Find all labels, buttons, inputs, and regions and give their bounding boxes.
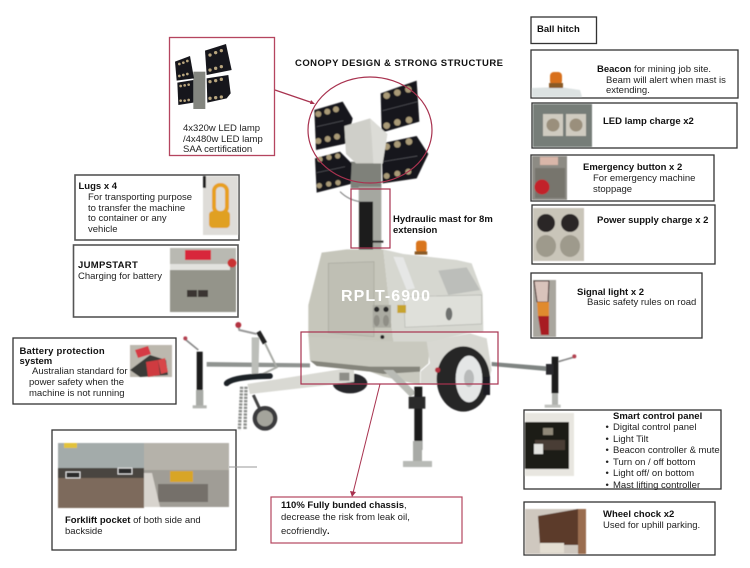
right jack <box>545 354 576 408</box>
panel: signal light <box>531 273 702 338</box>
panel: battery protection: power safety when the <box>29 377 124 388</box>
icon: LED lamp cluster <box>175 44 232 109</box>
panel: beacon: Beacon for mining job site. <box>597 64 711 75</box>
label: hydraulic mast: Hydraulic mast for 8m <box>393 214 493 225</box>
icon: wheel chock <box>525 509 586 554</box>
icon: battery isolator <box>130 345 172 377</box>
bullet list: • <box>606 422 609 433</box>
body lower and chassis <box>308 334 430 385</box>
LED lamp text <box>183 123 263 155</box>
LED lamp text: /4x480w LED lamp <box>183 134 263 145</box>
bullet list: • <box>606 480 609 491</box>
panel: lugs: For transporting purpose <box>88 192 192 203</box>
panel: forklift pocket: backside <box>65 526 102 537</box>
model label: RPLT-6900 <box>341 288 430 305</box>
bullet list: • <box>606 468 609 479</box>
LED lamp text: 4x320w LED lamp <box>183 123 260 134</box>
bullet list: Digital control panel <box>613 422 696 433</box>
back wheel <box>333 373 367 393</box>
body upper <box>308 249 393 342</box>
centre jack foot <box>403 441 432 467</box>
panel: emergency button: stoppage <box>593 184 632 195</box>
bullet list: Light off/ on bottom <box>613 468 694 479</box>
icon: emergency button <box>532 156 567 200</box>
panel: bunded chassis: decrease the risk from leak oil, <box>281 512 410 523</box>
beacon on roof <box>415 241 427 255</box>
panel: LED lamp charge: LED lamp charge x2 <box>603 116 694 127</box>
tongue jack and handle <box>235 322 277 377</box>
panel: bunded chassis: 110% Fully bunded chassis, <box>281 500 407 511</box>
bullet list: • <box>606 457 609 468</box>
panel: emergency button: Emergency button x 2 <box>583 162 682 173</box>
bullet list: • <box>606 445 609 456</box>
bullet list: Mast lifting controller <box>613 480 700 491</box>
lamp panels <box>314 81 428 193</box>
icon: jumpstart socket <box>170 248 236 312</box>
panel: battery protection: system <box>20 356 52 367</box>
panel: bunded chassis: ecofriendly. <box>281 526 330 537</box>
panel: LED lamp <box>170 38 274 156</box>
callout: chassis rectangle <box>301 332 498 384</box>
panel: ball hitch: Ball hitch <box>537 24 580 35</box>
trailer and body <box>183 241 576 450</box>
panel: lugs: vehicle <box>88 224 118 235</box>
label: hydraulic mast: extension <box>393 225 438 236</box>
LED lamp text: SAA certification <box>183 144 252 155</box>
panel: jumpstart: Charging for battery <box>78 271 162 282</box>
fender <box>421 333 492 385</box>
panel: jumpstart: JUMPSTART <box>78 260 138 271</box>
panel: ball hitch <box>531 17 596 44</box>
road wheel <box>437 346 490 412</box>
panel: battery protection: machine is not running <box>29 388 125 399</box>
drawbar <box>247 369 354 394</box>
arrow: forklift pocket pointer <box>229 466 257 468</box>
panel: power supply charge: Power supply charge x 2 <box>597 215 708 226</box>
panel: beacon: extending. <box>606 85 650 96</box>
lamp head and mast <box>314 81 428 250</box>
panel: beacon <box>531 50 738 98</box>
safety chain <box>239 387 246 430</box>
head box <box>344 118 387 163</box>
mast <box>340 162 383 250</box>
panel: bunded chassis <box>271 497 462 543</box>
panel: LED lamp charge <box>532 103 737 148</box>
panel: signal light: Basic safety rules on road <box>587 297 696 308</box>
panel: battery protection <box>13 338 176 404</box>
panel: jumpstart <box>74 245 238 317</box>
callout: lamp head circle <box>308 77 432 183</box>
panel: beacon: Beam will alert when mast is <box>606 75 726 86</box>
heading: canopy design: CONOPY DESIGN & STRONG STRUCTURE <box>295 58 503 69</box>
panel: emergency button <box>531 155 714 201</box>
icon: forklift pocket photos <box>58 443 229 508</box>
panel: lugs: to transfer the machine <box>88 203 185 214</box>
centre jack <box>409 387 425 450</box>
icon: beacon <box>532 72 582 97</box>
rear stabiliser bars <box>207 362 550 371</box>
bullet list: Beacon controller & mute <box>613 445 720 456</box>
icon: lifting lug <box>203 176 238 235</box>
panel: emergency button: For emergency machine <box>593 173 695 184</box>
panel: lugs <box>75 175 239 240</box>
panel: wheel chock: Wheel chock x2 <box>603 509 674 520</box>
icon: signal light <box>533 280 556 337</box>
arrow: LED panel to lamp head <box>275 90 315 104</box>
panel: power supply charge <box>532 205 715 264</box>
panel: battery protection: Battery protection <box>20 346 105 357</box>
bullet list: • <box>606 434 609 445</box>
label: hydraulic mast <box>393 214 493 236</box>
panel: wheel chock: Used for uphill parking. <box>603 520 700 531</box>
panel: smart control panel: Smart control panel <box>613 411 702 422</box>
icon: lamp sockets <box>533 104 592 147</box>
left jack <box>183 336 207 408</box>
panel: forklift pocket: Forklift pocket of both side and <box>65 515 201 526</box>
machine: trailer-mounted lighting tower <box>183 81 576 467</box>
panel: lugs: to container or any <box>88 213 167 224</box>
bullet list: Light Tilt <box>613 434 649 445</box>
panel: lugs: Lugs x 4 <box>78 181 118 192</box>
callout: mast rectangle <box>351 189 390 248</box>
panel: wheel chock <box>524 502 715 555</box>
hitch <box>227 376 270 383</box>
panel: forklift pocket <box>52 430 236 550</box>
panel: smart control panel <box>524 410 721 491</box>
panel: battery protection: Australian standard for <box>32 366 128 377</box>
jockey wheel <box>253 395 277 431</box>
icon: power sockets <box>533 208 584 261</box>
icon: control panel <box>525 413 574 476</box>
arrow: chassis to bunded note <box>350 384 380 497</box>
bullet list: Turn on / off bottom <box>613 457 695 468</box>
panel: signal light: Signal light x 2 <box>577 287 644 298</box>
bullet list <box>606 422 720 491</box>
